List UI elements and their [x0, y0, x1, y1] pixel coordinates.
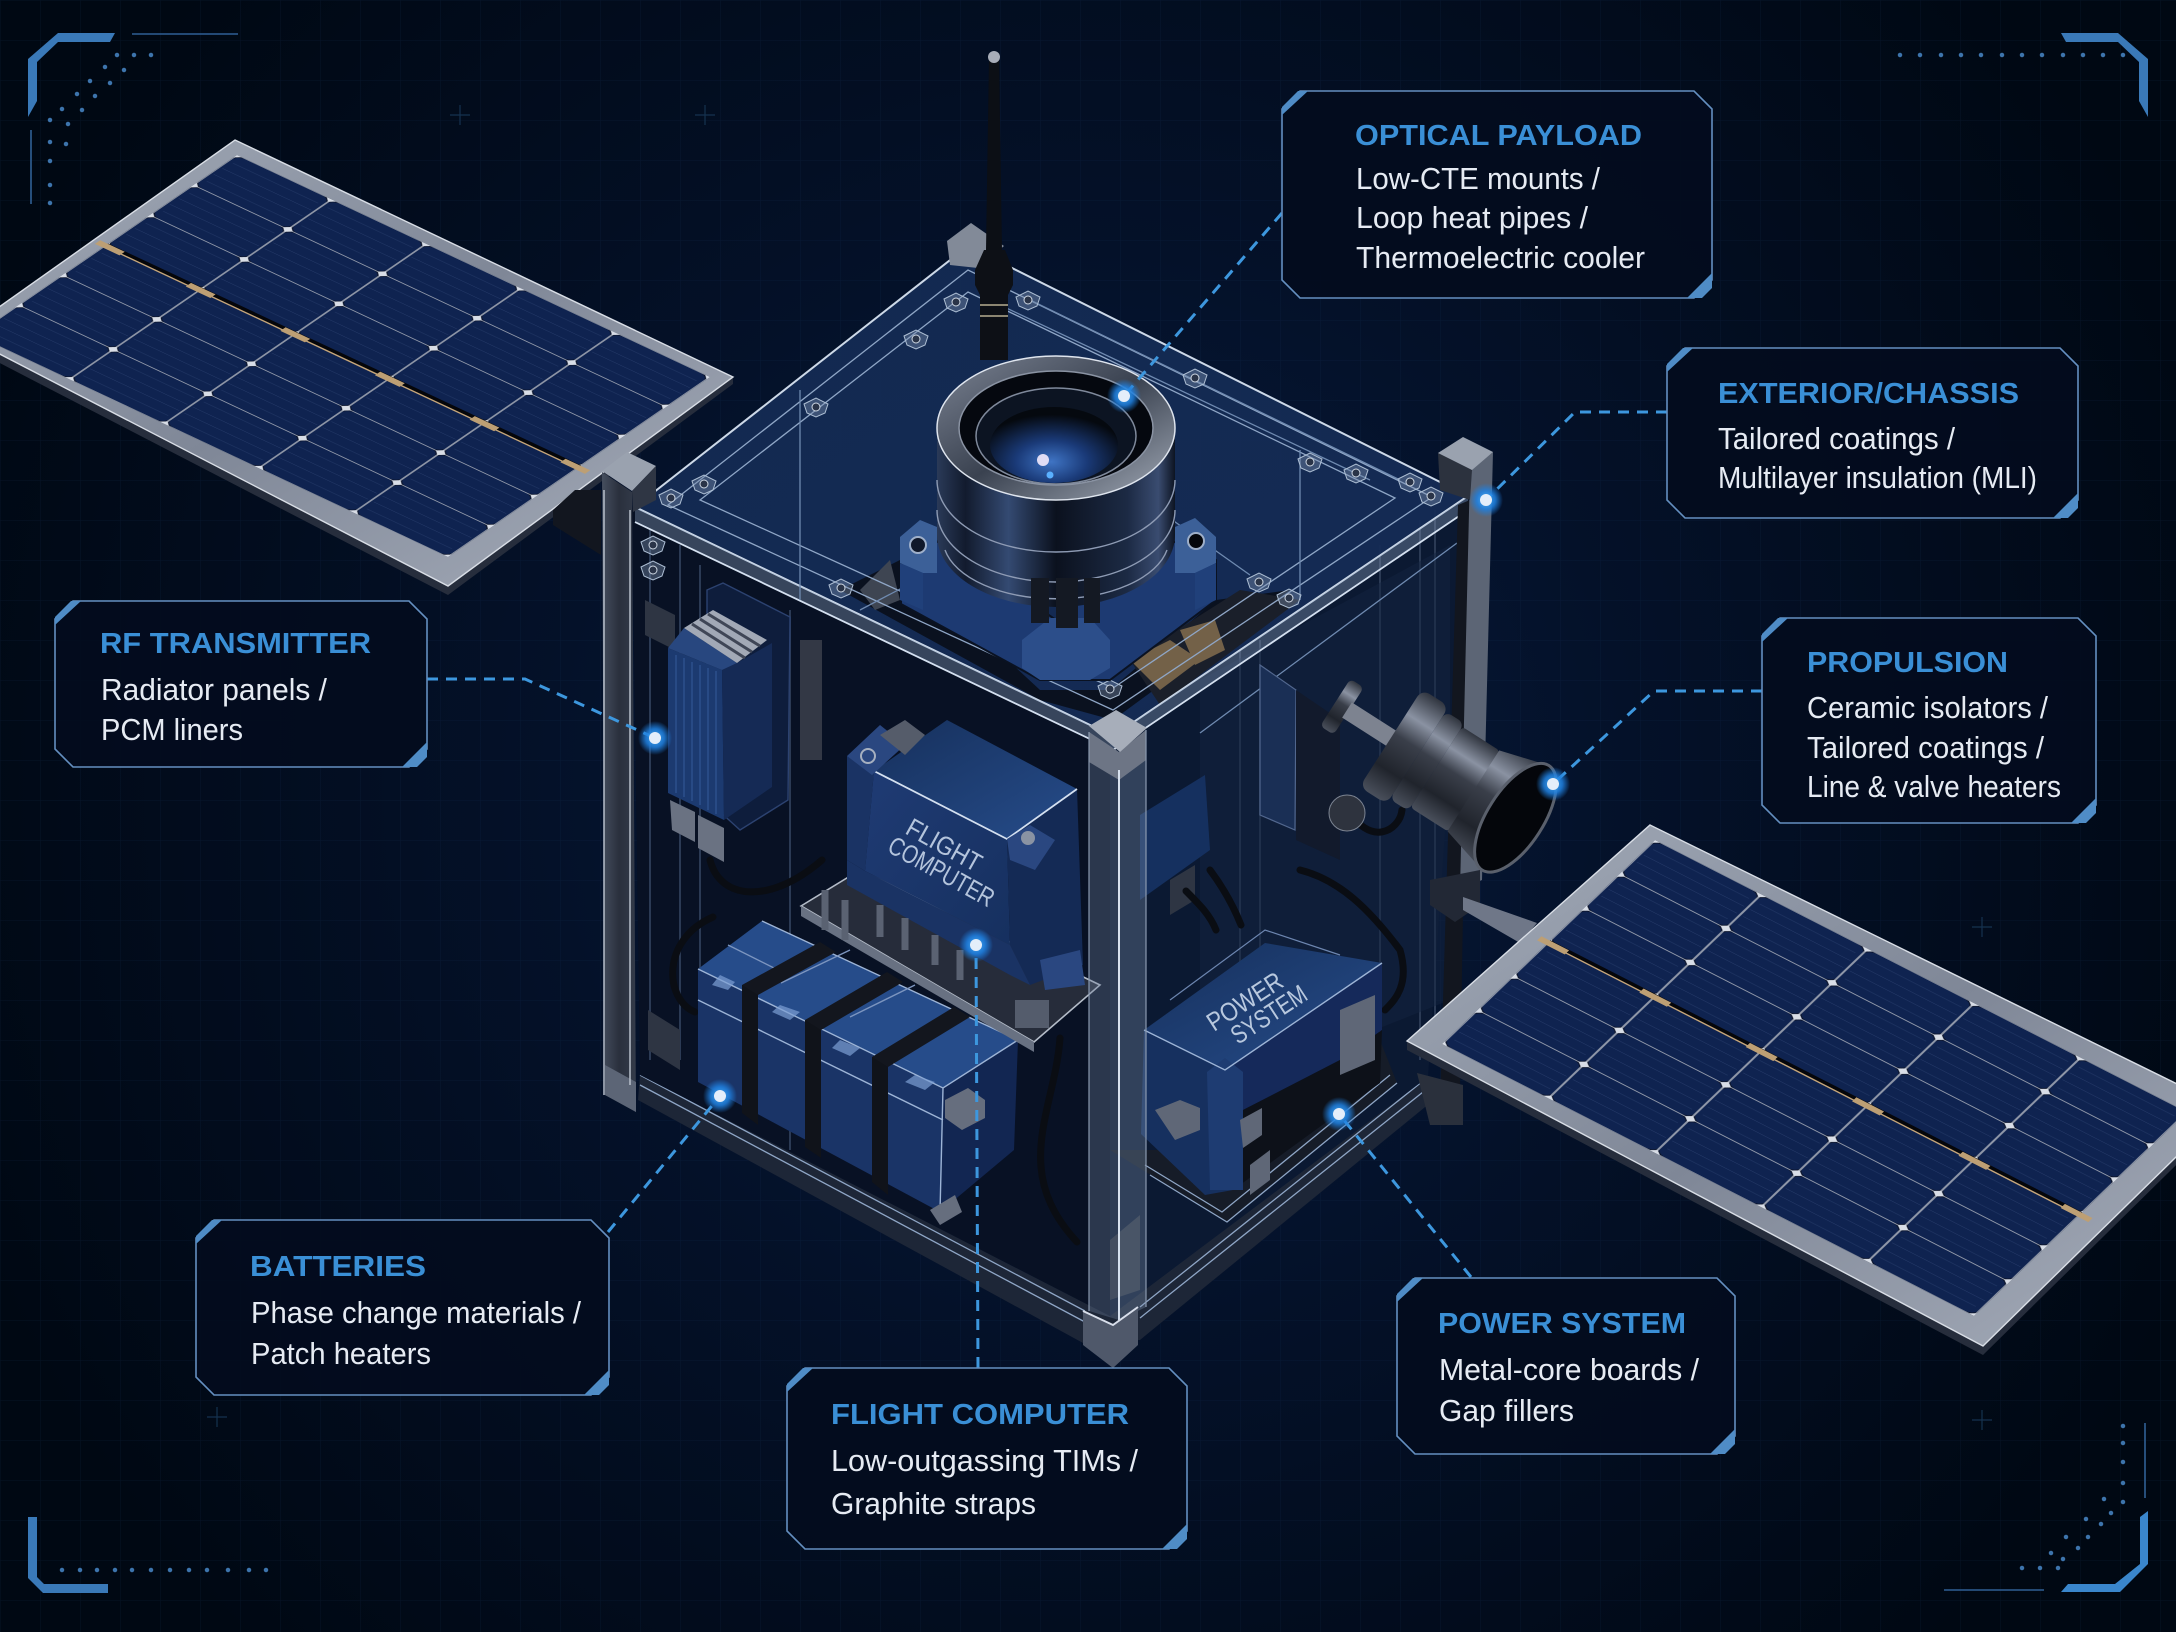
frame corner: top right — [1900, 33, 2148, 117]
heading: optical payload: OPTICAL PAYLOAD — [1355, 120, 1642, 152]
panel: propulsion — [1762, 618, 2096, 823]
corner post: front — [1083, 710, 1147, 1368]
text: propulsion details: Tailored coatings / — [1807, 730, 2044, 765]
lens glass — [990, 407, 1118, 483]
text: propulsion details — [1807, 690, 2061, 804]
panel: batteries — [196, 1220, 609, 1395]
text: flight computer details — [831, 1443, 1138, 1521]
text: power system details: Gap fillers — [1439, 1393, 1574, 1428]
frame corner: bottom right — [1944, 1423, 2148, 1592]
rear walls — [632, 507, 1110, 1316]
heading: RF transmitter: RF TRANSMITTER — [100, 628, 371, 660]
text: batteries details: Phase change materials / — [251, 1295, 581, 1330]
label on power system: POWER — [1201, 966, 1289, 1037]
text: batteries details — [251, 1295, 581, 1371]
internal rails — [650, 510, 1435, 1150]
heading: propulsion: PROPULSION — [1807, 647, 2008, 679]
text: propulsion details: Line & valve heaters — [1807, 769, 2061, 804]
leader line: flight computer — [959, 928, 993, 1368]
panel: exterior chassis — [1667, 348, 2078, 518]
heading: exterior chassis: EXTERIOR/CHASSIS — [1718, 378, 2019, 410]
text: power system details — [1439, 1352, 1699, 1428]
lens ring — [937, 356, 1175, 500]
component: RF transmitter — [668, 583, 822, 1012]
solar panel: right — [1407, 825, 2176, 1355]
text: RF transmitter details: Radiator panels / — [101, 672, 327, 707]
frame corner: top left — [28, 33, 238, 204]
wall brackets — [645, 600, 1195, 1300]
optical payload — [900, 356, 1216, 680]
label on flight computer: FLIGHT — [901, 812, 987, 878]
text: optical payload details: Low-CTE mounts / — [1356, 161, 1600, 196]
right wall — [1110, 496, 1468, 1316]
label on power system: SYSTEM — [1225, 979, 1313, 1050]
heading: power system: POWER SYSTEM — [1438, 1308, 1686, 1340]
glass top panel — [635, 246, 1468, 750]
lens mount — [900, 518, 1216, 680]
text: flight computer details: Graphite straps — [831, 1486, 1036, 1521]
leader line: exterior chassis — [1469, 412, 1667, 517]
leader line: batteries — [608, 1079, 737, 1232]
component: thruster — [1260, 650, 1572, 885]
panel: flight computer — [787, 1368, 1187, 1549]
text: optical payload details: Thermoelectric cooler — [1356, 240, 1645, 275]
floor plate — [638, 850, 1430, 1343]
text: exterior chassis details — [1718, 421, 2037, 495]
text: exterior chassis details: Multilayer insulation (MLI) — [1718, 460, 2037, 495]
text: optical payload details: Loop heat pipes / — [1356, 200, 1588, 235]
leader line: power system — [1322, 1097, 1471, 1277]
corner post: left — [602, 452, 656, 1112]
corner post: right — [1417, 437, 1493, 1125]
solar panel: left — [0, 140, 733, 595]
label on flight computer: COMPUTER — [883, 830, 1000, 913]
text: propulsion details: Ceramic isolators / — [1807, 690, 2048, 725]
text: RF transmitter details — [101, 672, 327, 747]
leader line: RF transmitter — [427, 679, 672, 755]
antenna — [975, 51, 1013, 360]
text: optical payload details — [1356, 161, 1645, 275]
label on power system — [1201, 966, 1313, 1050]
label on flight computer — [883, 812, 1000, 913]
lens barrel — [937, 428, 1175, 607]
component: flight computer — [801, 720, 1241, 1242]
component: power system — [1110, 870, 1403, 1222]
panel: optical payload — [1282, 91, 1712, 298]
leader line: propulsion — [1536, 691, 1762, 801]
component: batteries — [698, 921, 1018, 1225]
text: power system details: Metal-core boards / — [1439, 1352, 1699, 1387]
text: RF transmitter details: PCM liners — [101, 712, 243, 747]
text: flight computer details: Low-outgassing TIMs / — [831, 1443, 1138, 1478]
leader line: optical payload — [1107, 213, 1282, 413]
panel: power system — [1397, 1278, 1735, 1454]
corner post: back — [947, 223, 1004, 268]
frame corner: bottom left — [28, 1517, 266, 1593]
text: batteries details: Patch heaters — [251, 1336, 431, 1371]
text: exterior chassis details: Tailored coatings / — [1718, 421, 1955, 456]
mounting plate — [801, 870, 1100, 1042]
panel: RF transmitter — [55, 601, 427, 767]
heading: flight computer: FLIGHT COMPUTER — [831, 1399, 1129, 1431]
heading: batteries: BATTERIES — [250, 1251, 426, 1283]
